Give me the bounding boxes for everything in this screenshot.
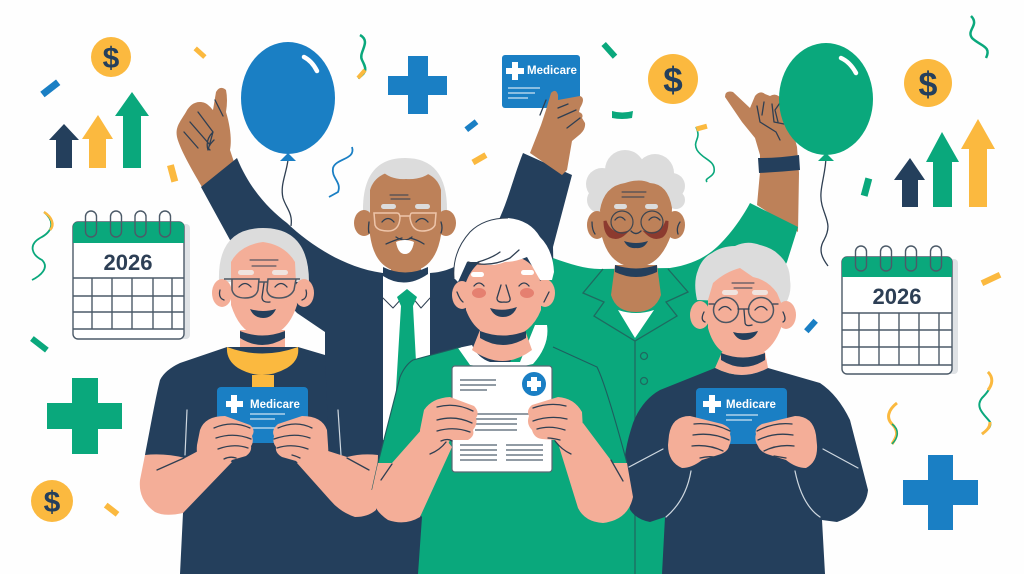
coin: top right dollar xyxy=(904,59,952,107)
hands: centre woman xyxy=(381,397,623,481)
neck xyxy=(472,330,532,361)
head: white-haired woman xyxy=(452,218,555,338)
balloon: green xyxy=(779,43,873,266)
coin: top left dollar xyxy=(91,37,131,77)
lapels and placket xyxy=(583,269,688,574)
green top xyxy=(378,345,634,574)
coin: top right dollar: $ xyxy=(919,66,938,104)
person: front right man with card xyxy=(624,243,868,574)
sweater creases xyxy=(629,449,858,517)
calendar: right 2026 xyxy=(842,246,958,374)
person: front centre woman with document xyxy=(372,218,634,574)
neck band: left man xyxy=(240,331,285,345)
neck xyxy=(715,352,768,375)
head: left man with glasses xyxy=(212,228,314,336)
white blouse xyxy=(618,310,654,338)
medicare card: left person: Medicare xyxy=(250,399,300,411)
plus: large blue right xyxy=(903,455,978,530)
medicare card: right person xyxy=(696,388,787,444)
raised hand holding card xyxy=(502,55,585,175)
white collar xyxy=(458,325,547,368)
collar lines xyxy=(383,297,430,308)
arm: right xyxy=(557,423,633,523)
calendar: left 2026: 2026 xyxy=(104,250,152,275)
raised hand: thumbs up xyxy=(177,88,234,190)
head: right man with round glasses xyxy=(690,243,796,358)
person: back man in navy suit with raised arms xyxy=(177,55,585,574)
plus: large green left xyxy=(47,378,122,454)
green tie xyxy=(393,289,417,440)
navy suit xyxy=(201,153,572,574)
medicare card: top: Medicare xyxy=(527,65,577,77)
arm: left xyxy=(372,420,452,522)
coin: top centre dollar: $ xyxy=(663,61,683,100)
hands: right person xyxy=(668,416,817,468)
raised arm and hand xyxy=(725,92,800,232)
head: man with grey hair and moustache xyxy=(354,158,456,275)
coin: bottom left dollar xyxy=(31,480,73,522)
navy tee xyxy=(145,347,420,574)
neck: woman xyxy=(611,265,661,312)
coin: top left dollar: $ xyxy=(103,42,120,75)
calendar: right 2026: 2026 xyxy=(873,284,921,309)
green jacket xyxy=(420,203,798,574)
arm: left xyxy=(140,450,232,515)
balloon: blue xyxy=(241,42,335,226)
medicare card: right person: Medicare xyxy=(726,399,776,411)
growth arrows: right xyxy=(894,119,995,207)
neck xyxy=(240,330,285,357)
navy sweater xyxy=(624,368,868,574)
medicare card: left person xyxy=(217,387,308,443)
neck band: centre woman xyxy=(480,331,526,345)
growth arrows: left xyxy=(49,92,149,168)
document xyxy=(452,366,552,472)
person: front left man with card xyxy=(140,228,420,574)
sleeve creases xyxy=(185,410,341,455)
neck band: woman xyxy=(615,265,657,277)
neck band: man xyxy=(383,267,428,283)
head: woman with curly grey hair xyxy=(586,150,685,267)
person: back woman in green jacket with raised arm xyxy=(420,92,800,574)
yellow collar xyxy=(227,347,298,387)
neck band: right man xyxy=(721,353,765,367)
coin: bottom left dollar: $ xyxy=(44,486,61,519)
body outline xyxy=(372,347,627,490)
arm: right xyxy=(297,450,378,517)
coin: top centre dollar xyxy=(648,54,698,104)
calendar: left 2026 xyxy=(73,211,190,339)
plus: blue top xyxy=(388,56,447,114)
hands: left person xyxy=(197,416,328,472)
white shirt xyxy=(383,273,430,440)
